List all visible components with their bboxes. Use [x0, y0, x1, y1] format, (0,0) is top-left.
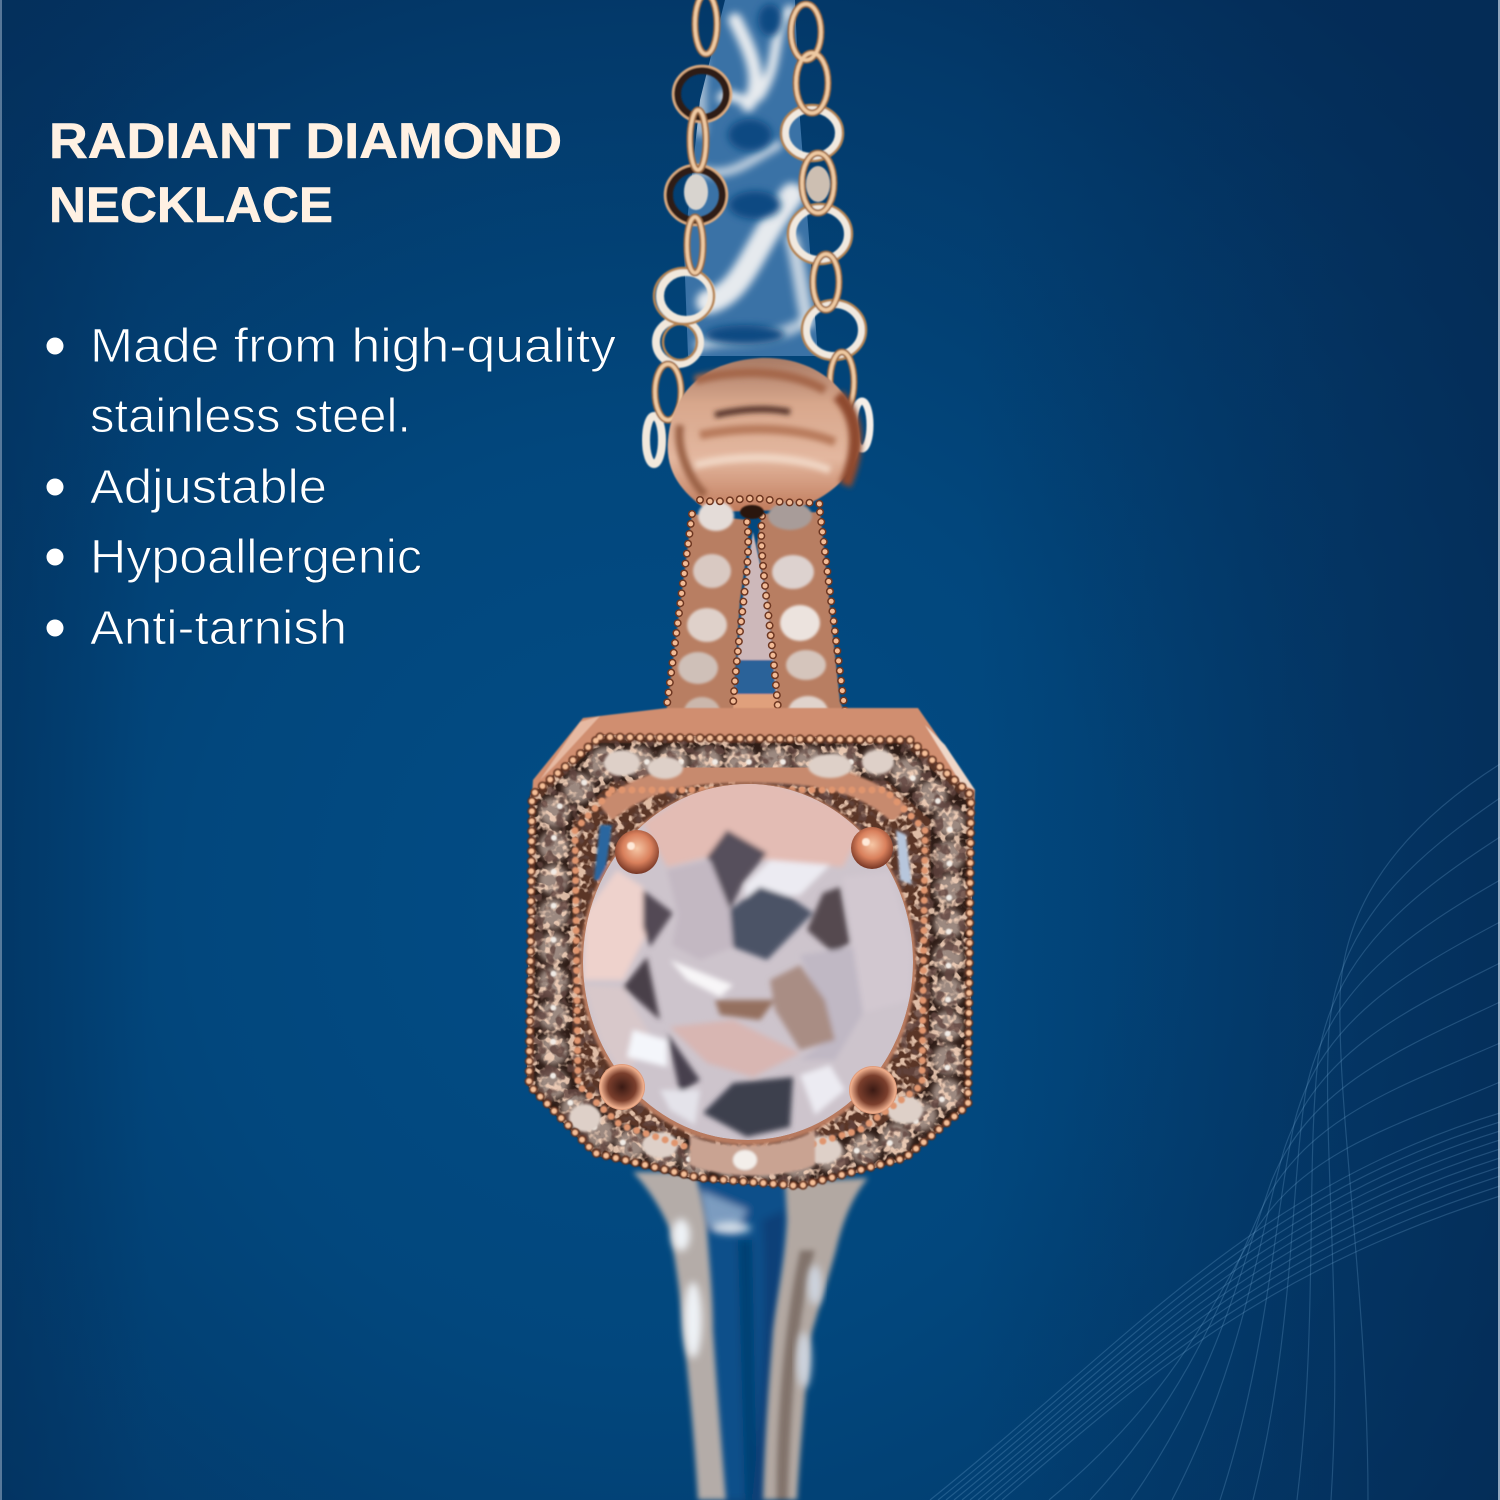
- right strand highlights: [797, 1265, 822, 1388]
- bullet: material: stainless steel.: [90, 390, 411, 443]
- prong: bottom right: [849, 1066, 897, 1114]
- title: RADIANT DIAMOND: [49, 113, 562, 169]
- arched rose collar under bail: [605, 772, 900, 815]
- pale rings: [785, 109, 862, 356]
- inner milgrain: [575, 790, 925, 1148]
- prong: top left: [615, 830, 659, 874]
- right chain: [781, 4, 870, 449]
- metal speckle texture: [527, 735, 973, 1188]
- stone glints: [553, 762, 950, 1166]
- prong: bottom left: [599, 1064, 645, 1110]
- centre gemstone: [583, 780, 913, 1140]
- outer milgrain: [529, 737, 971, 1186]
- bullet: hypoallergenic: Hypoallergenic: [90, 531, 422, 584]
- ribbon strips: [666, 514, 748, 745]
- pendant ribbon bail: [666, 499, 848, 752]
- upper dark rings: [669, 70, 727, 221]
- lower reflected strands: [633, 1172, 868, 1500]
- bullet: material: [46, 320, 616, 443]
- bail beading: [666, 499, 845, 735]
- pale lower rings: [646, 272, 712, 464]
- pendant back plate: [530, 708, 975, 830]
- left chain: [646, 0, 731, 464]
- small bail stones: [678, 501, 828, 728]
- clear bail loop: [668, 358, 860, 512]
- narrow links: [655, 0, 717, 420]
- swirled reflection strip between chains: [680, 0, 820, 360]
- halo dark setting: [553, 762, 950, 1166]
- feature list: [46, 320, 616, 655]
- pale halo stones: [569, 750, 923, 1164]
- pendant halo frame: [527, 735, 973, 1188]
- left strand: [633, 1172, 726, 1500]
- centre blue reflection: [690, 1175, 800, 1500]
- prong: top right: [851, 827, 893, 869]
- centre stone setting: [580, 783, 916, 1176]
- left strand highlights: [672, 1219, 751, 1358]
- bullet: adjustable: Adjustable: [90, 461, 327, 514]
- right strand: [763, 1178, 868, 1500]
- bullet: anti-tarnish: Anti-tarnish: [90, 602, 347, 655]
- dark speckle texture: [527, 735, 973, 1188]
- halo small stones: [553, 762, 950, 1166]
- title: [49, 113, 562, 233]
- decorative wave lines: [930, 764, 1500, 1500]
- narrow links: [791, 4, 854, 412]
- title: NECKLACE: [49, 177, 333, 233]
- bullet: material: Made from high-quality: [90, 320, 616, 373]
- gap behind bail: [728, 532, 782, 752]
